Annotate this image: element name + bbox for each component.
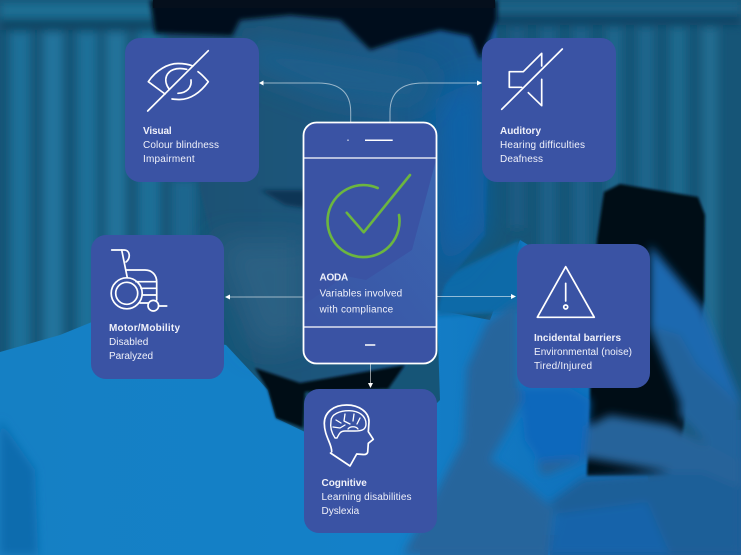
text: AODA: AODA: [320, 273, 348, 284]
text: cognitive: [322, 478, 412, 517]
icon: muted speaker: [502, 49, 562, 109]
icon: green check: [328, 175, 410, 257]
icon: warning triangle: [537, 267, 594, 317]
panel: motor/mobility: [91, 235, 224, 379]
text: visual: Impairment: [143, 154, 195, 165]
text: AODA: [318, 273, 402, 316]
phone home button: [365, 344, 375, 346]
hand: [403, 245, 741, 555]
arrow: phone to motor: [225, 294, 303, 300]
panel: incidental barriers: [517, 244, 650, 388]
shirt: [0, 240, 660, 555]
dark phone: [587, 184, 705, 476]
icon: wheelchair: [111, 250, 167, 311]
text: motor: Paralyzed: [109, 351, 153, 362]
hair: [150, 0, 497, 60]
text: auditory: Hearing difficulties: [500, 140, 585, 151]
text: motor: Motor/Mobility: [109, 323, 180, 334]
text: cognitive: Dyslexia: [322, 506, 360, 517]
arrow: phone to incidental: [437, 294, 516, 299]
arrow: phone to auditory: [390, 80, 482, 122]
text: auditory: Auditory: [500, 126, 541, 137]
text: incidental: Environmental (noise): [534, 347, 632, 358]
icon: head with brain: [324, 405, 373, 466]
arrow: phone to cognitive: [368, 364, 373, 388]
panel: auditory: [482, 38, 616, 182]
panel: phone AODA: [304, 122, 436, 364]
text: cognitive: Cognitive: [322, 478, 367, 489]
arrow: phone to visual: [259, 80, 351, 122]
face and neck: [150, 0, 497, 392]
hand edge underlay: [550, 420, 741, 555]
panel: visual: [125, 38, 259, 182]
panel: cognitive: [304, 389, 437, 533]
text: visual: Visual: [143, 126, 172, 137]
icon: crossed eye: [148, 51, 208, 111]
text: cognitive: Learning disabilities: [322, 492, 412, 503]
text: AODA: with compliance: [318, 305, 394, 316]
text: auditory: [500, 126, 585, 165]
text: incidental: [534, 333, 632, 372]
text: incidental: Tired/Injured: [534, 361, 592, 372]
text: AODA: Variables involved: [320, 289, 402, 300]
screen highlight: [304, 160, 436, 326]
text: visual: [143, 126, 219, 165]
collar shadow: [255, 365, 405, 428]
phone speaker: [348, 139, 393, 141]
text: motor: Disabled: [109, 337, 148, 348]
text: motor: [109, 323, 180, 362]
text: visual: Colour blindness: [143, 140, 219, 151]
text: incidental: Incidental barriers: [534, 333, 621, 344]
text: auditory: Deafness: [500, 154, 543, 165]
